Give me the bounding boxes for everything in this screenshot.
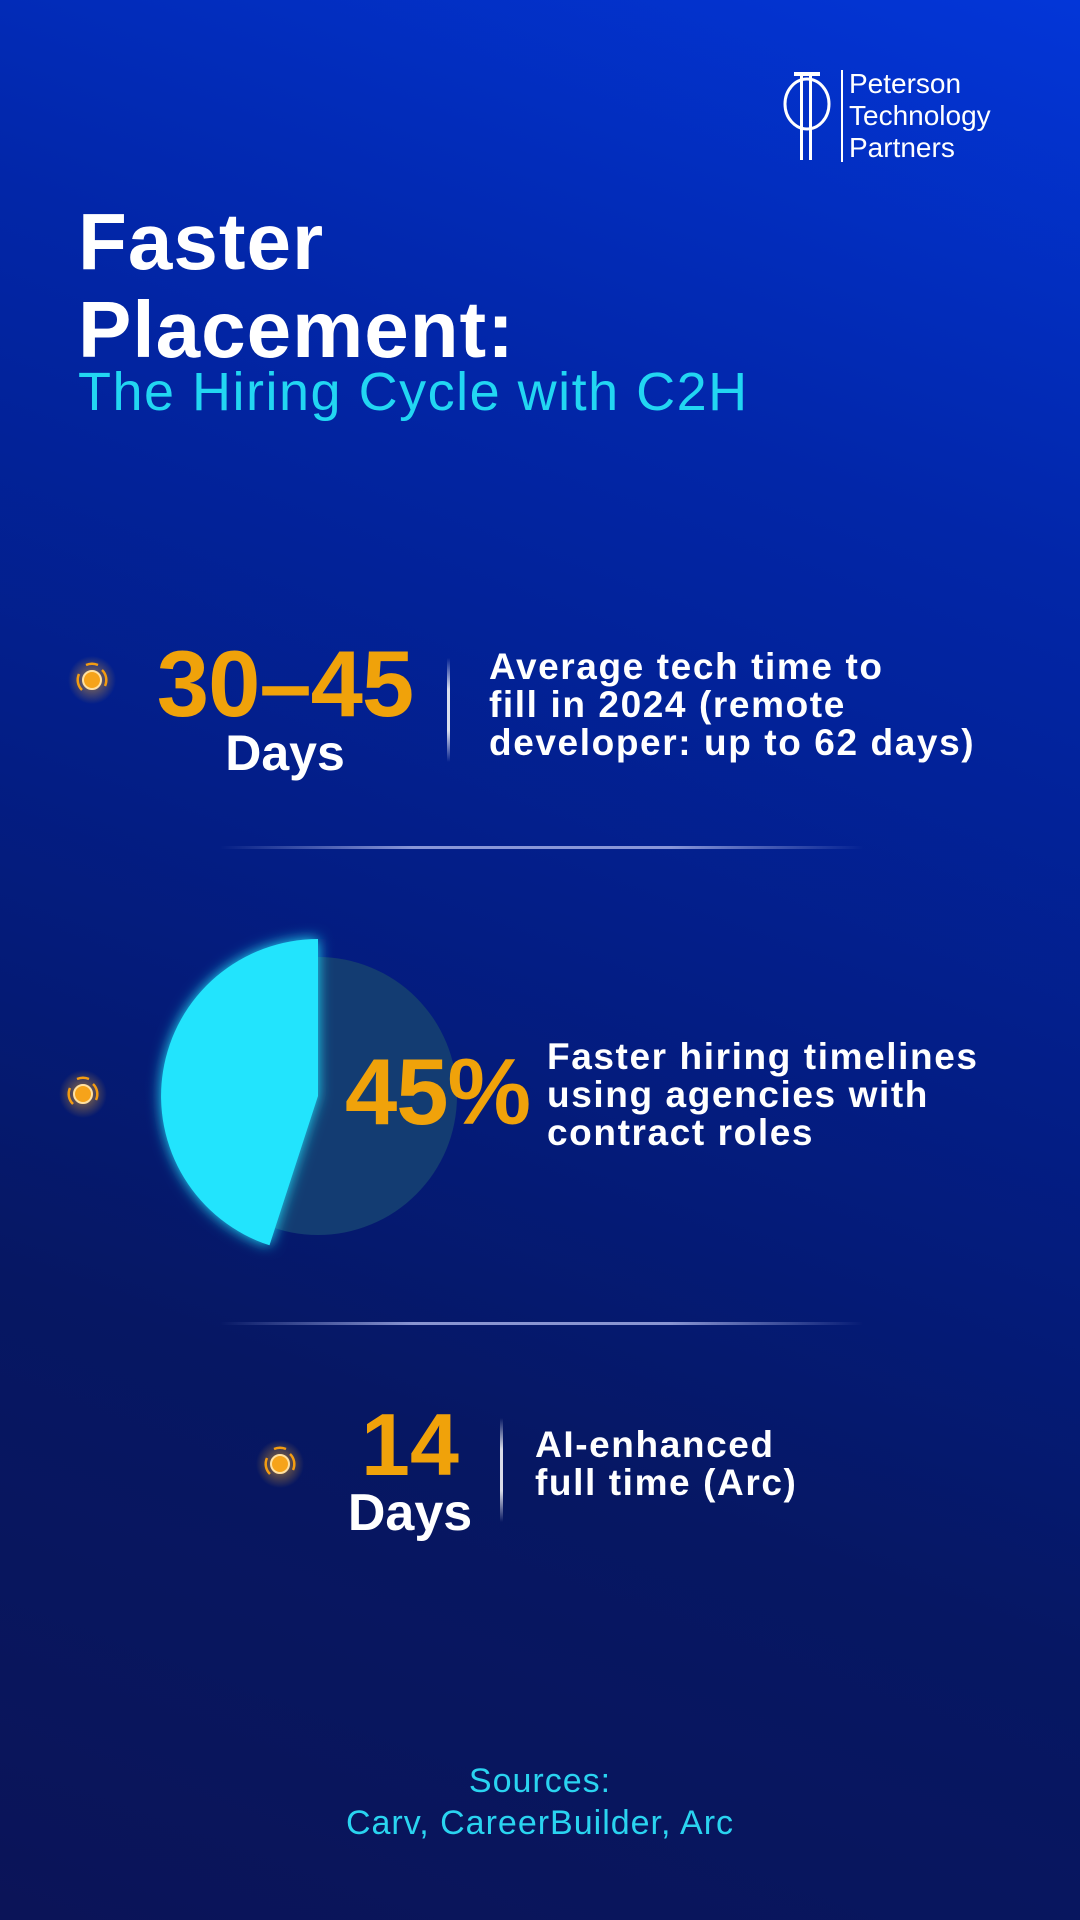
stat: 30-45 days: 30–45 [157,631,413,736]
text: faster hiring: Faster hiring timelines [547,1036,979,1077]
logo: Partners [849,132,955,163]
title: Faster [78,197,324,286]
text: faster hiring: contract roles [547,1112,814,1153]
title: Placement: [78,285,515,374]
pie chart: 45% [150,928,457,1254]
sources [346,1762,734,1842]
stat: 14 days: Days [348,1484,472,1542]
logo: Peterson [849,68,961,99]
logo [784,68,991,163]
text: average tech time [489,646,975,763]
title [78,197,515,374]
icon: pulse dot 2 [60,1072,106,1116]
text: faster hiring [547,1036,979,1153]
text: faster hiring: using agencies with [547,1074,929,1115]
text: AI-enhanced [535,1424,797,1503]
subtitle: The Hiring Cycle with C2H [78,362,749,422]
icon: pulse dot 3 [258,1442,302,1486]
text: AI-enhanced: full time (Arc) [535,1462,797,1503]
stat: 30-45 days: Days [225,725,345,781]
stat: 45%: 45% [345,1039,530,1144]
stat: 14 days: 14 [361,1395,459,1494]
icon: pulse dot 1 [70,658,114,702]
stat: 14 days [348,1395,472,1542]
sources: Carv, CareerBuilder, Arc [346,1804,734,1842]
text: average tech time: fill in 2024 (remote [489,684,846,725]
text: average tech time: Average tech time to [489,646,884,687]
text: average tech time: developer: up to 62 days) [489,722,975,763]
text: AI-enhanced: AI-enhanced [535,1424,775,1465]
sources: Sources: [469,1762,611,1800]
logo: Technology [849,100,991,131]
